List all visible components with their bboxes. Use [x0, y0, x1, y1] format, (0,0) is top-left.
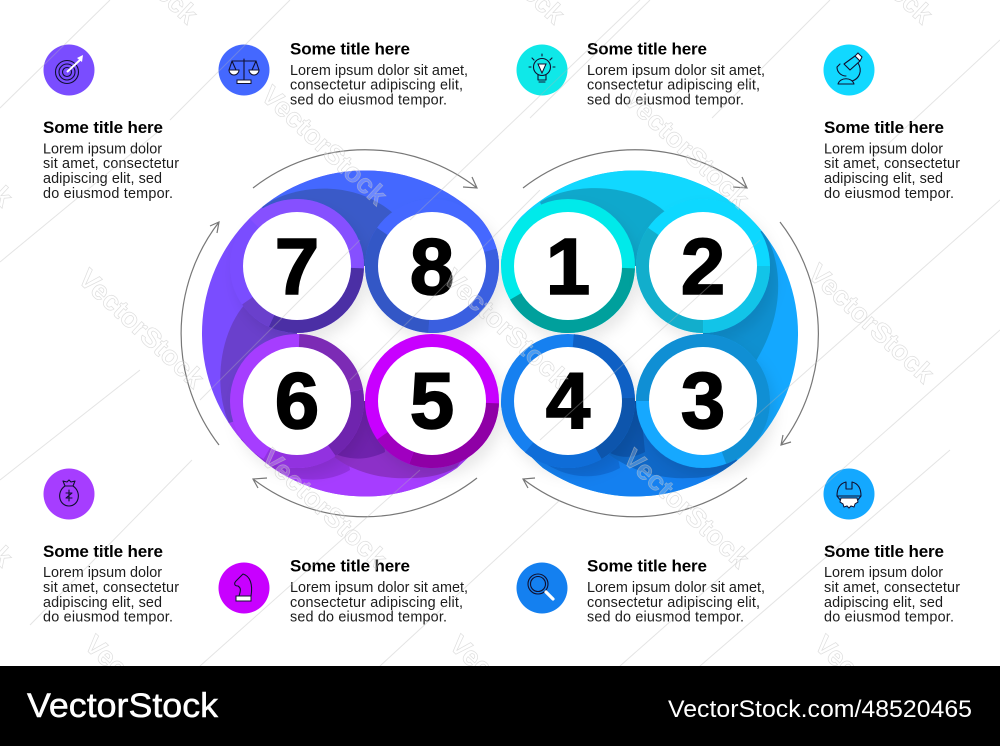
text block: bottom right: sit amet, consectetur [824, 580, 960, 596]
step 8 [358, 192, 506, 340]
text block: top third: Some title here [587, 40, 707, 58]
icon: money bag [44, 468, 94, 520]
text block: bottom right: do eiusmod tempor. [824, 610, 954, 626]
step 5 [354, 323, 510, 479]
text block: top third: consectetur adipiscing elit, [587, 78, 760, 94]
text block: top right: Some title here [824, 118, 944, 137]
arrow: right bottom [523, 478, 747, 517]
step 3 [636, 334, 770, 468]
arrow: right side [780, 222, 818, 445]
footer bar: VectorStock [27, 687, 219, 725]
text block: top right: sit amet, consectetur [824, 156, 960, 172]
watermark text: VectorStock [72, 263, 211, 395]
text block: bottom left: do eiusmod tempor. [43, 610, 173, 626]
watermark text: VectorStock [617, 83, 756, 215]
arrow: left top [253, 150, 477, 188]
icon: helmet and gear [824, 468, 874, 520]
text block: bottom left: adipiscing elit, sed [43, 595, 162, 611]
left purple-blue disc [202, 170, 499, 496]
text block: top right [824, 118, 960, 202]
watermark text: VectorStock [802, 258, 941, 390]
text block: bottom left: sit amet, consectetur [43, 580, 179, 596]
footer bar [0, 666, 1000, 746]
icon: magnifier [516, 562, 568, 614]
text block: bottom right [824, 542, 960, 626]
icon: light bulb [516, 44, 568, 96]
arrow: right top [523, 150, 747, 188]
text block: top third: sed do eiusmod tempor. [587, 92, 744, 108]
text block: top second [290, 40, 468, 108]
watermark text: VectorStock [617, 443, 756, 575]
step 2: 2 [681, 222, 725, 311]
text block: top right: do eiusmod tempor. [824, 186, 954, 202]
text block: bottom right: Some title here [824, 542, 944, 561]
arrow: left bottom [253, 478, 477, 517]
right cyan-blue disc [501, 170, 798, 496]
white centre of right disc [500, 266, 703, 401]
text block: bottom right: adipiscing elit, sed [824, 595, 943, 611]
text block: top left: sit amet, consectetur [43, 156, 179, 172]
icon: chess knight [218, 562, 270, 614]
text block: top left: do eiusmod tempor. [43, 186, 173, 202]
text block: top second: consectetur adipiscing elit, [290, 78, 463, 94]
text block: top second: Some title here [290, 40, 410, 58]
step 1 [501, 199, 635, 333]
step 4: 4 [546, 356, 591, 445]
step 7 [211, 180, 383, 352]
text block: top left [43, 118, 179, 202]
text block: bottom second: consectetur adipiscing elit, [290, 595, 463, 611]
icon: target [44, 44, 94, 96]
text block: bottom right: Lorem ipsum dolor [824, 565, 943, 581]
text block: bottom left [43, 542, 179, 626]
step 4 [485, 318, 651, 484]
text block: bottom third [587, 557, 765, 626]
arrow: left side [181, 222, 219, 445]
watermark text: VectorStock [255, 80, 394, 212]
step 3: 3 [681, 356, 725, 445]
text block: bottom second: Some title here [290, 557, 410, 576]
text block: top left: Lorem ipsum dolor [43, 142, 162, 158]
text block: top left: Some title here [43, 118, 163, 137]
text block: top second: sed do eiusmod tempor. [290, 92, 447, 108]
text block: bottom third: consectetur adipiscing elit, [587, 595, 760, 611]
text block: bottom second: sed do eiusmod tempor. [290, 610, 447, 626]
text block: top right: adipiscing elit, sed [824, 171, 943, 187]
text block: bottom second: Lorem ipsum dolor sit amet, [290, 580, 468, 596]
text block: top right: Lorem ipsum dolor [824, 142, 943, 158]
step 7: 7 [275, 222, 319, 311]
step 2 [636, 199, 770, 333]
text block: bottom third: Lorem ipsum dolor sit amet, [587, 580, 765, 596]
step 6: 6 [275, 356, 319, 445]
text block: top left: adipiscing elit, sed [43, 171, 162, 187]
text block: bottom second [290, 557, 468, 626]
icon: scales [218, 44, 270, 96]
watermark text: VectorStock [437, 263, 576, 395]
footer bar: VectorStock.com/48520465 [668, 696, 972, 723]
text block: bottom third: sed do eiusmod tempor. [587, 610, 744, 626]
text block: top second: Lorem ipsum dolor sit amet, [290, 63, 468, 79]
step 6 [213, 317, 381, 485]
white centre of left disc [297, 266, 500, 401]
text block: bottom left: Lorem ipsum dolor [43, 565, 162, 581]
watermark text: VectorStock [255, 443, 394, 575]
text block: top third [587, 40, 765, 108]
step 8: 8 [410, 222, 454, 311]
text block: top third: Lorem ipsum dolor sit amet, [587, 63, 765, 79]
step 1: 1 [546, 222, 590, 311]
text block: bottom third: Some title here [587, 557, 707, 576]
step 5: 5 [410, 356, 454, 445]
text block: bottom left: Some title here [43, 542, 163, 561]
icon: microscope [824, 44, 874, 96]
